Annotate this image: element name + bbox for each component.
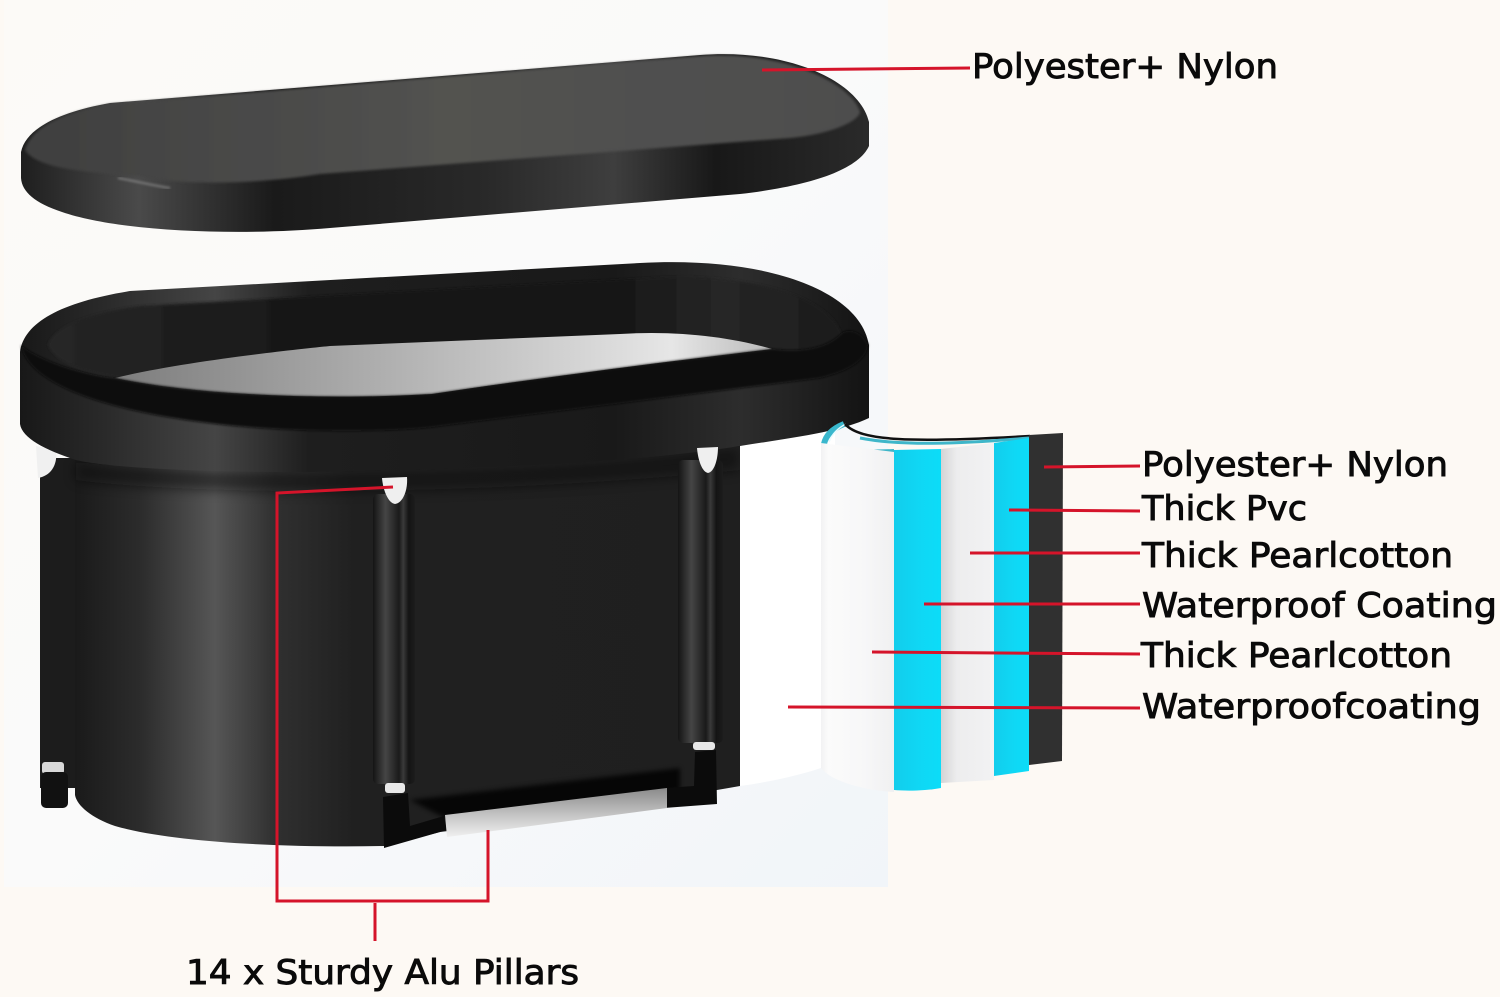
lid top face [25,55,860,183]
curved layer edges [824,424,1030,451]
label: waterproof coating layer: Waterproof Coating [1142,586,1497,626]
left pillar [373,477,447,848]
lid [21,54,869,232]
tub body [20,262,869,846]
label: pillars: 14 x Sturdy Alu Pillars [186,953,579,993]
layer: blue pvc [994,438,1029,776]
label: inner waterproof coating: Waterproofcoating [1142,687,1481,727]
label: pearl cotton layer: Thick Pearlcotton [1141,536,1453,576]
shadow under rim [76,446,740,491]
rim front lip [21,331,868,431]
rim opening [48,277,842,398]
tub interior silver wall [115,333,772,397]
lid side wall [21,54,869,232]
layer: white pearl cotton [821,443,894,792]
layer: grey pearl cotton [941,443,994,783]
rim outer [20,262,869,472]
label: lid material: Polyester+ Nylon [972,47,1278,87]
material layers [821,424,1063,792]
label: outer layer: Polyester+ Nylon [1142,445,1448,485]
label: pvc layer: Thick Pvc [1141,489,1307,529]
right pillar [664,447,723,808]
cut-away white section [740,428,835,786]
left side pillar [36,446,76,808]
red leader lines [277,68,1140,941]
layer: blue coating [894,449,941,791]
handle bar [445,788,667,837]
aluminium pillars and handle [373,447,723,848]
lid notch highlight [118,178,170,188]
layer: black fabric [1029,433,1063,765]
tub wall [75,420,740,846]
label: second pearl cotton layer: Thick Pearlcotton [1140,636,1452,676]
shadow above handle [410,768,680,818]
